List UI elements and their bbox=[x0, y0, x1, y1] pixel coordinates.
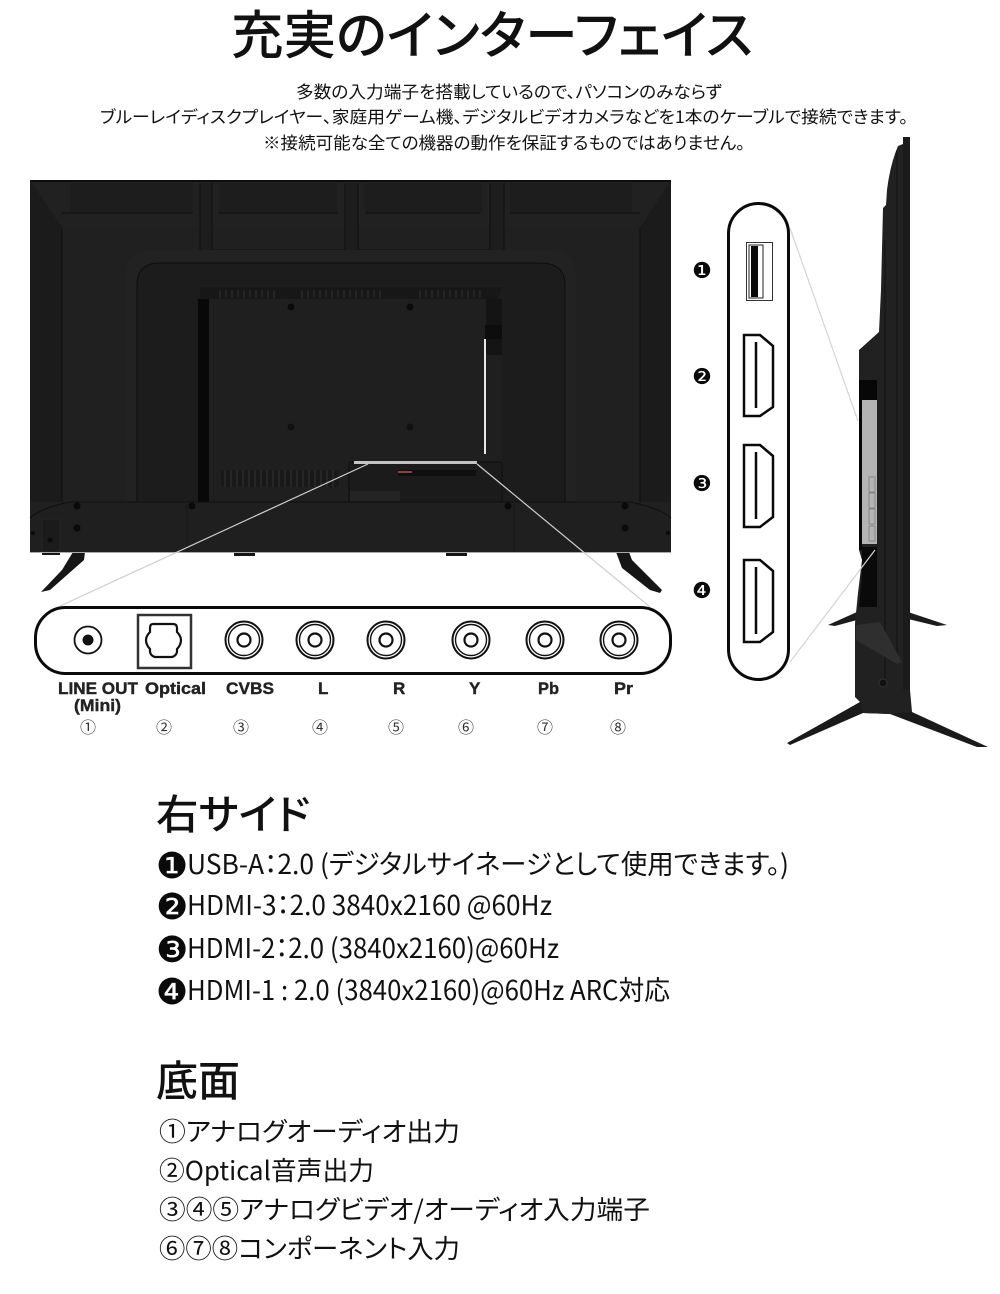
mounting screws bbox=[31, 304, 670, 542]
port numbers: ③ bbox=[233, 714, 249, 738]
lower bezel bbox=[30, 502, 671, 552]
side port numbers: ❹ bbox=[692, 579, 712, 604]
intro text: ※接続可能な全ての機器の動作を保証するものではありません。 bbox=[263, 129, 745, 154]
right side port list: ❹ bbox=[156, 972, 188, 1013]
port labels bbox=[58, 679, 633, 715]
port numbers: ⑤ bbox=[388, 714, 404, 738]
heading: bottom: 底面 bbox=[156, 1048, 240, 1109]
right side port list bbox=[156, 843, 789, 1013]
white edge bbox=[484, 339, 486, 454]
panel: side ports bbox=[728, 204, 788, 680]
callout lines: bottom ports bbox=[58, 464, 650, 607]
panel: bottom ports bbox=[36, 608, 670, 674]
right side port list: HDMI-3：2.0 3840x2160 @60Hz bbox=[187, 884, 552, 923]
side port numbers: ❸ bbox=[692, 472, 712, 497]
bottom port list: ⑥⑦⑧コンポーネント入力 bbox=[159, 1229, 460, 1266]
port labels: Pb bbox=[538, 679, 559, 698]
bottom port list: ①アナログオーディオ出力 bbox=[159, 1112, 460, 1149]
port numbers: ⑦ bbox=[537, 714, 553, 738]
bottom port list: ③④⑤アナログビデオ/オーディオ入力端子 bbox=[159, 1190, 650, 1227]
right side port list: HDMI-2：2.0 (3840x2160)@60Hz bbox=[187, 927, 559, 966]
heading: right side: 右サイド bbox=[156, 781, 310, 841]
top vent slots bbox=[220, 290, 480, 298]
body bbox=[855, 137, 912, 714]
bottom port list: ②Optical音声出力 bbox=[159, 1151, 374, 1188]
TV side view bbox=[787, 137, 988, 747]
right side port list: ❶ bbox=[156, 846, 188, 887]
intro text: ブルーレイディスクプレイヤー、家庭用ゲーム機、デジタルビデオカメラなどを1本のケーブルで接続できます。 bbox=[100, 103, 908, 128]
port labels: Pr bbox=[614, 679, 633, 698]
port labels: (Mini) bbox=[74, 696, 121, 715]
bottom port bay bbox=[349, 462, 502, 502]
right side port list: HDMI-1 : 2.0 (3840x2160)@60Hz ARC対応 bbox=[187, 969, 670, 1008]
port labels: R bbox=[393, 679, 405, 698]
icon: line out jack bbox=[74, 626, 102, 654]
upper panels bbox=[70, 183, 632, 250]
icon: optical port bbox=[138, 615, 191, 668]
port numbers: ② bbox=[156, 714, 172, 738]
port labels: L bbox=[318, 679, 328, 698]
front stand feet bbox=[787, 702, 988, 747]
intro text bbox=[100, 78, 908, 154]
icon: RCA jacks bbox=[226, 622, 638, 658]
side port numbers bbox=[692, 259, 712, 604]
TV rear view bbox=[30, 180, 671, 593]
intro text: 多数の入力端子を搭載しているので、パソコンのみならず bbox=[296, 78, 722, 103]
port numbers: ① bbox=[80, 714, 96, 738]
port labels: Y bbox=[469, 679, 481, 698]
right side port list: USB-A：2.0 (デジタルサイネージとして使用できます。) bbox=[187, 843, 789, 882]
callout lines: side ports bbox=[790, 228, 875, 662]
port labels: Optical bbox=[145, 679, 206, 698]
port numbers: ⑧ bbox=[610, 714, 626, 738]
vents bbox=[221, 470, 339, 487]
port numbers: ⑥ bbox=[458, 714, 474, 738]
icon: HDMI ports bbox=[744, 335, 773, 642]
side port numbers: ❶ bbox=[692, 259, 712, 284]
port labels: LINE OUT bbox=[58, 679, 139, 698]
right side port list: ❷ bbox=[156, 887, 188, 928]
icon: USB port bbox=[746, 242, 772, 300]
port labels: CVBS bbox=[226, 679, 274, 698]
rear stand feet bbox=[828, 612, 857, 626]
right side port list: ❸ bbox=[156, 930, 188, 971]
left stand leg bbox=[41, 552, 85, 592]
port numbers: ④ bbox=[312, 714, 328, 738]
port numbers bbox=[80, 714, 626, 738]
bottom port list bbox=[159, 1112, 650, 1266]
side port numbers: ❷ bbox=[692, 365, 712, 390]
